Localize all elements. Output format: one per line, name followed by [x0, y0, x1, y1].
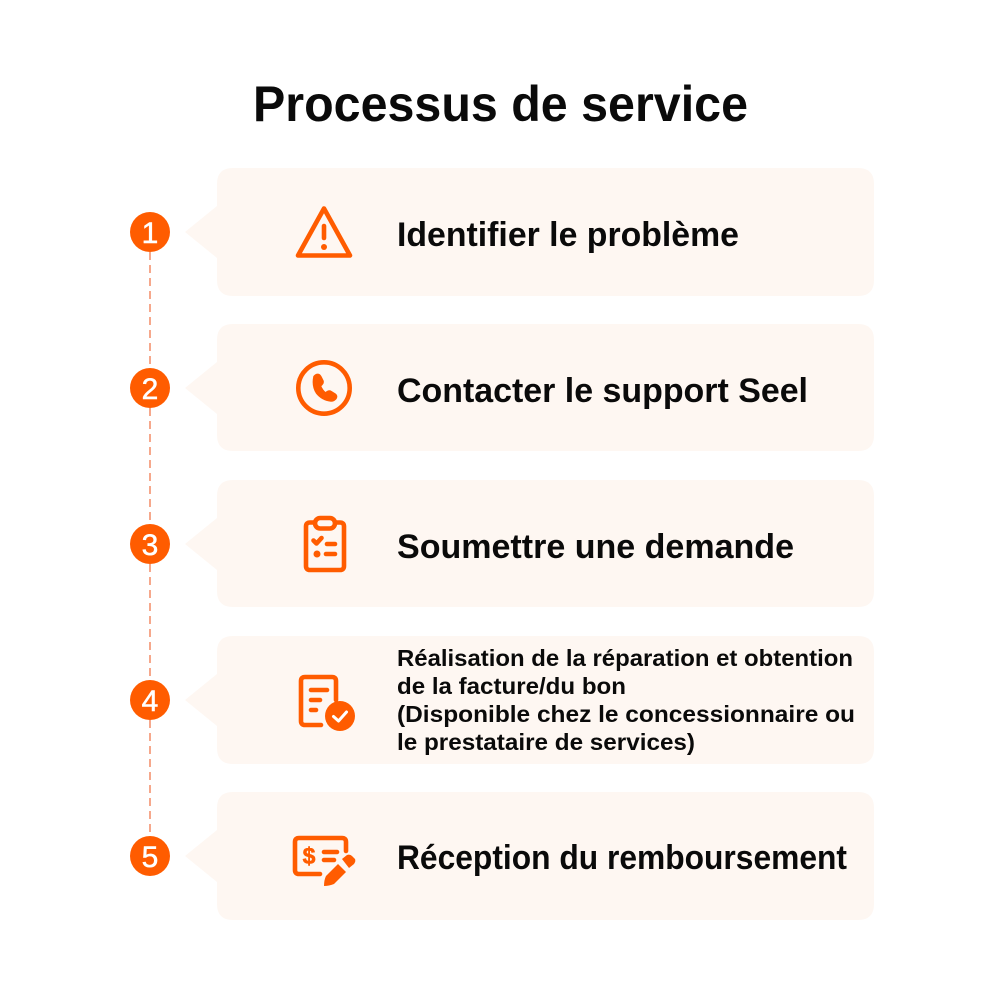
step number 3: 3: [142, 529, 158, 562]
step number 5: 5: [142, 841, 158, 874]
step 3 label: Soumettre une demande: [397, 528, 794, 566]
panel: step 4: [130, 636, 874, 764]
step 2 label: Contacter le support Seel: [397, 372, 808, 410]
panel background 3: [185, 480, 874, 607]
step 4 label: [397, 645, 855, 755]
panel background 1: [185, 168, 874, 296]
panel: step 5: [130, 792, 874, 920]
panel: step 3: [130, 480, 874, 607]
step 1 label: Identifier le problème: [397, 216, 739, 254]
icon: warning triangle: [298, 208, 350, 256]
icon: document with check badge: [301, 677, 355, 731]
step 4 label: de la facture/du bon: [397, 673, 626, 699]
panel background 5: [185, 792, 874, 920]
step 5 label: Réception du remboursement: [397, 839, 847, 877]
panel background 4: [185, 636, 874, 764]
step 4 label: le prestataire de services): [397, 729, 695, 755]
step number 5: [130, 836, 170, 876]
timeline dashed connector: [149, 252, 151, 836]
step 4 label: (Disponible chez le concessionnaire ou: [397, 701, 855, 727]
panel: step 2: [130, 324, 874, 451]
step number 2: 2: [142, 373, 158, 406]
icon: clipboard checklist: [306, 518, 344, 570]
title: Processus de service: [253, 75, 748, 132]
step number 4: 4: [142, 685, 158, 718]
panel: step 1: [130, 168, 874, 296]
panel background 2: [185, 324, 874, 451]
icon: cheque with pen: [295, 838, 355, 886]
step number 3: [130, 524, 170, 564]
step number 2: [130, 368, 170, 408]
step number 1: [130, 212, 170, 252]
step number 1: 1: [142, 217, 158, 250]
step number 4: [130, 680, 170, 720]
icon: phone in circle: [298, 362, 350, 414]
icon: cheque with pen: $: [303, 843, 316, 869]
step 4 label: Réalisation de la réparation et obtention: [397, 645, 853, 671]
